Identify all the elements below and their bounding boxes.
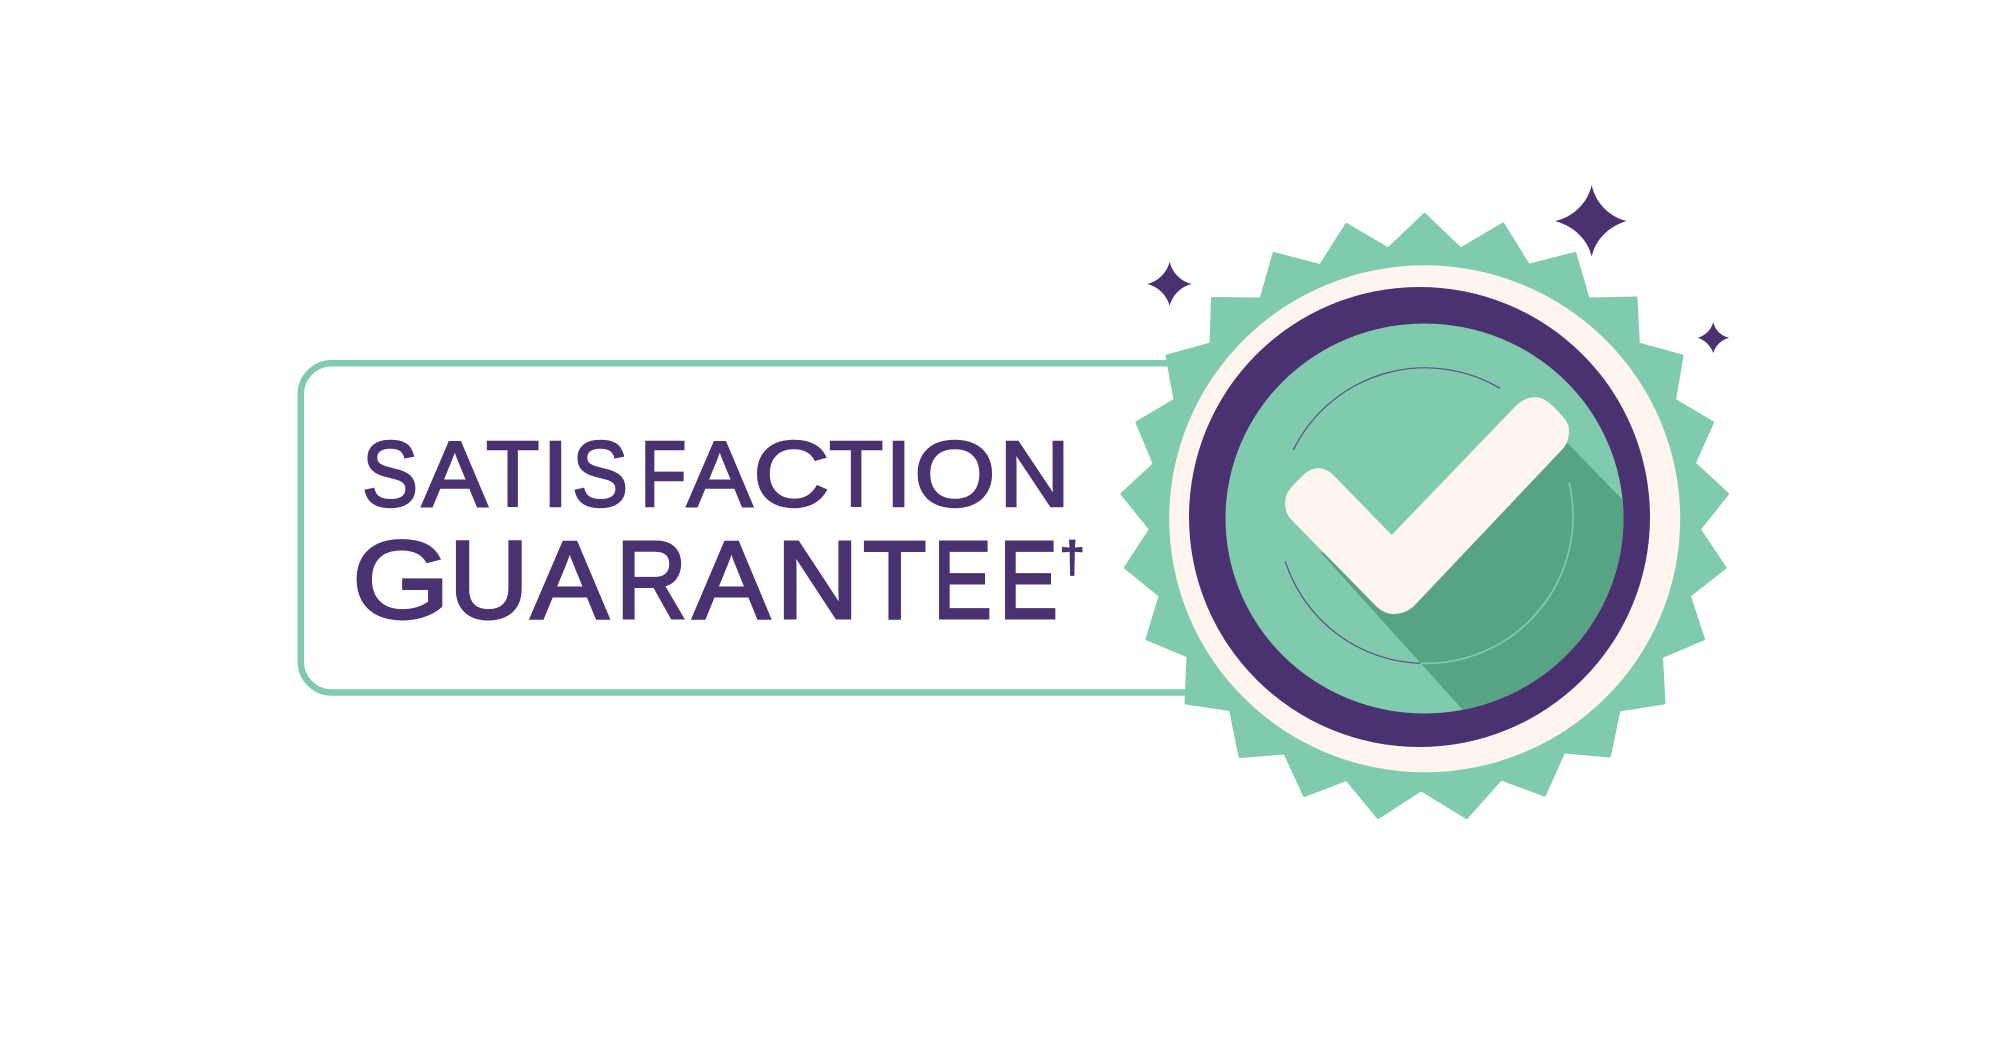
heading line: SATISFACTION bbox=[362, 422, 1070, 526]
text: E bbox=[999, 519, 1058, 642]
text: C bbox=[753, 422, 829, 526]
thin arc: bottom right light bbox=[1421, 482, 1573, 663]
inner green disc bbox=[1226, 324, 1624, 714]
icon: sparkle left bbox=[1147, 262, 1192, 306]
text: E bbox=[933, 519, 992, 642]
text: A bbox=[531, 519, 609, 642]
text: G bbox=[352, 519, 450, 642]
starburst seal bbox=[1122, 214, 1728, 818]
text: T bbox=[863, 519, 927, 642]
text: † bbox=[1060, 533, 1084, 582]
text: A bbox=[422, 422, 487, 526]
text: N bbox=[999, 422, 1070, 526]
text: T bbox=[486, 422, 540, 526]
text: I bbox=[885, 422, 912, 526]
purple ring bbox=[1189, 287, 1650, 747]
icon: sparkle large top right bbox=[1555, 185, 1627, 257]
text: A bbox=[686, 422, 752, 526]
check mark bbox=[1285, 397, 1569, 614]
text: S bbox=[362, 422, 419, 526]
text: R bbox=[616, 519, 687, 642]
badge: starburst seal with check mark bbox=[1122, 214, 1728, 818]
heading line: GUARANTEE with dagger bbox=[352, 519, 1084, 642]
text: I bbox=[542, 422, 569, 526]
text: A bbox=[693, 519, 770, 642]
long shadow of check mark bbox=[1320, 443, 1624, 710]
icon: sparkle small right bbox=[1698, 322, 1729, 353]
thin arc: bottom left bbox=[1285, 561, 1421, 663]
text: U bbox=[449, 519, 529, 642]
text: T bbox=[829, 422, 884, 526]
text: F bbox=[640, 422, 686, 526]
cream ring bbox=[1169, 265, 1680, 772]
text: S bbox=[572, 422, 629, 526]
text: O bbox=[914, 422, 996, 526]
panel: rounded outline box behind heading bbox=[301, 363, 1351, 692]
text: N bbox=[776, 519, 859, 642]
thin arc: top left bbox=[1293, 368, 1500, 450]
